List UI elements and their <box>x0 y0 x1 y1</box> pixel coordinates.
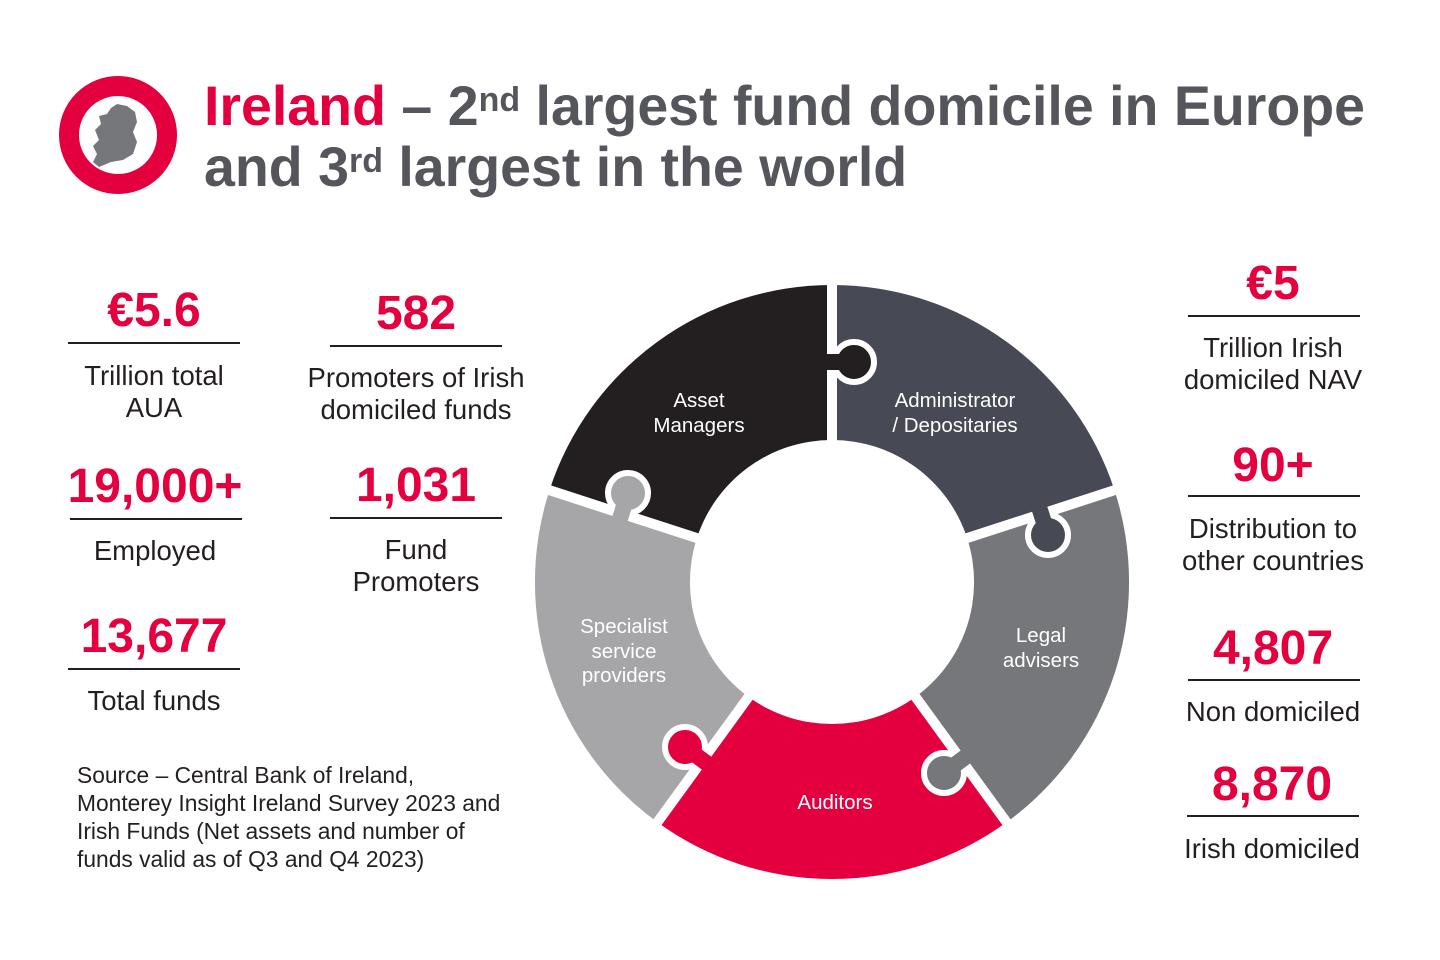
stat: 19,000+ employed <box>68 460 242 566</box>
segment: Administrator / Depositaries: / Depositaries <box>892 414 1018 437</box>
stat: 4,807 non domiciled: 4,807 <box>1213 622 1333 675</box>
stat: 13,677 total funds <box>68 610 240 716</box>
stat: 582 promoters <box>307 287 524 425</box>
segment: Administrator / Depositaries <box>832 285 1114 538</box>
knobs <box>608 342 1068 793</box>
stat: 4,807 non domiciled <box>1186 622 1360 727</box>
stat: 5.6 trillion AUA: Trillion total <box>84 360 224 391</box>
source note <box>77 762 500 872</box>
segment: Specialist service providers: providers <box>582 664 666 687</box>
segment: Specialist service providers <box>535 490 748 822</box>
stat: 5.6 trillion AUA <box>68 284 240 423</box>
stat: 8,870 irish domiciled <box>1184 758 1360 864</box>
stat: 13,677 total funds: 13,677 <box>81 610 227 663</box>
stat: 1,031 fund promoters <box>330 459 502 597</box>
stat: 5 trillion NAV <box>1184 257 1362 395</box>
segment: Asset Managers: Managers <box>653 414 745 437</box>
stat: 582 promoters: 582 <box>376 287 456 340</box>
stat: 19,000+ employed: 19,000+ <box>68 460 242 513</box>
segment: Legal advisers: Legal <box>1016 624 1066 647</box>
stat: 582 promoters: domiciled funds <box>320 394 512 425</box>
stat: 8,870 irish domiciled: 8,870 <box>1212 758 1332 811</box>
segment: Asset Managers: Asset <box>673 389 725 412</box>
source note: funds valid as of Q3 and Q4 2023) <box>77 846 424 872</box>
stat: 13,677 total funds: Total funds <box>87 685 220 716</box>
stat: 19,000+ employed: Employed <box>94 535 216 566</box>
segment: Auditors <box>657 697 1007 879</box>
stat: 1,031 fund promoters: Fund <box>385 534 447 565</box>
source note: Irish Funds (Net assets and number of <box>77 818 465 844</box>
segment: Asset Managers <box>550 285 832 538</box>
title: and 3rd largest in the world <box>204 136 907 198</box>
stat: 90+ distribution: Distribution to <box>1189 513 1357 544</box>
stat: 5.6 trillion AUA: AUA <box>126 392 182 423</box>
icon: Ireland logo <box>59 76 177 194</box>
stat: 4,807 non domiciled: Non domiciled <box>1186 696 1360 727</box>
stat: 90+ distribution: 90+ <box>1232 439 1314 492</box>
stat: 5 trillion NAV: €5 <box>1246 257 1300 310</box>
segment: Legal advisers: advisers <box>1003 649 1079 672</box>
stat: 8,870 irish domiciled: Irish domiciled <box>1184 833 1360 864</box>
title: Ireland – 2nd largest fund domicile in Europe <box>204 75 1365 137</box>
source note: Source – Central Bank of Ireland, <box>77 762 414 788</box>
stat: 90+ distribution: other countries <box>1182 545 1364 576</box>
stat: 1,031 fund promoters: 1,031 <box>356 459 476 512</box>
title <box>204 75 1365 198</box>
segment: Auditors: Auditors <box>797 791 873 814</box>
segment: Administrator / Depositaries: Administrator <box>895 389 1016 412</box>
segment: Legal advisers <box>916 490 1129 822</box>
stat: 90+ distribution <box>1182 439 1364 576</box>
segment: Specialist service providers: service <box>592 640 656 663</box>
stat: 582 promoters: Promoters of Irish <box>307 362 524 393</box>
stat: 5 trillion NAV: Trillion Irish <box>1203 332 1343 363</box>
stat: 5.6 trillion AUA: €5.6 <box>107 284 201 337</box>
source note: Monterey Insight Ireland Survey 2023 and <box>77 790 500 816</box>
segment: Specialist service providers: Specialist <box>580 615 668 638</box>
stat: 5 trillion NAV: domiciled NAV <box>1184 364 1362 395</box>
stat: 1,031 fund promoters: Promoters <box>353 566 479 597</box>
